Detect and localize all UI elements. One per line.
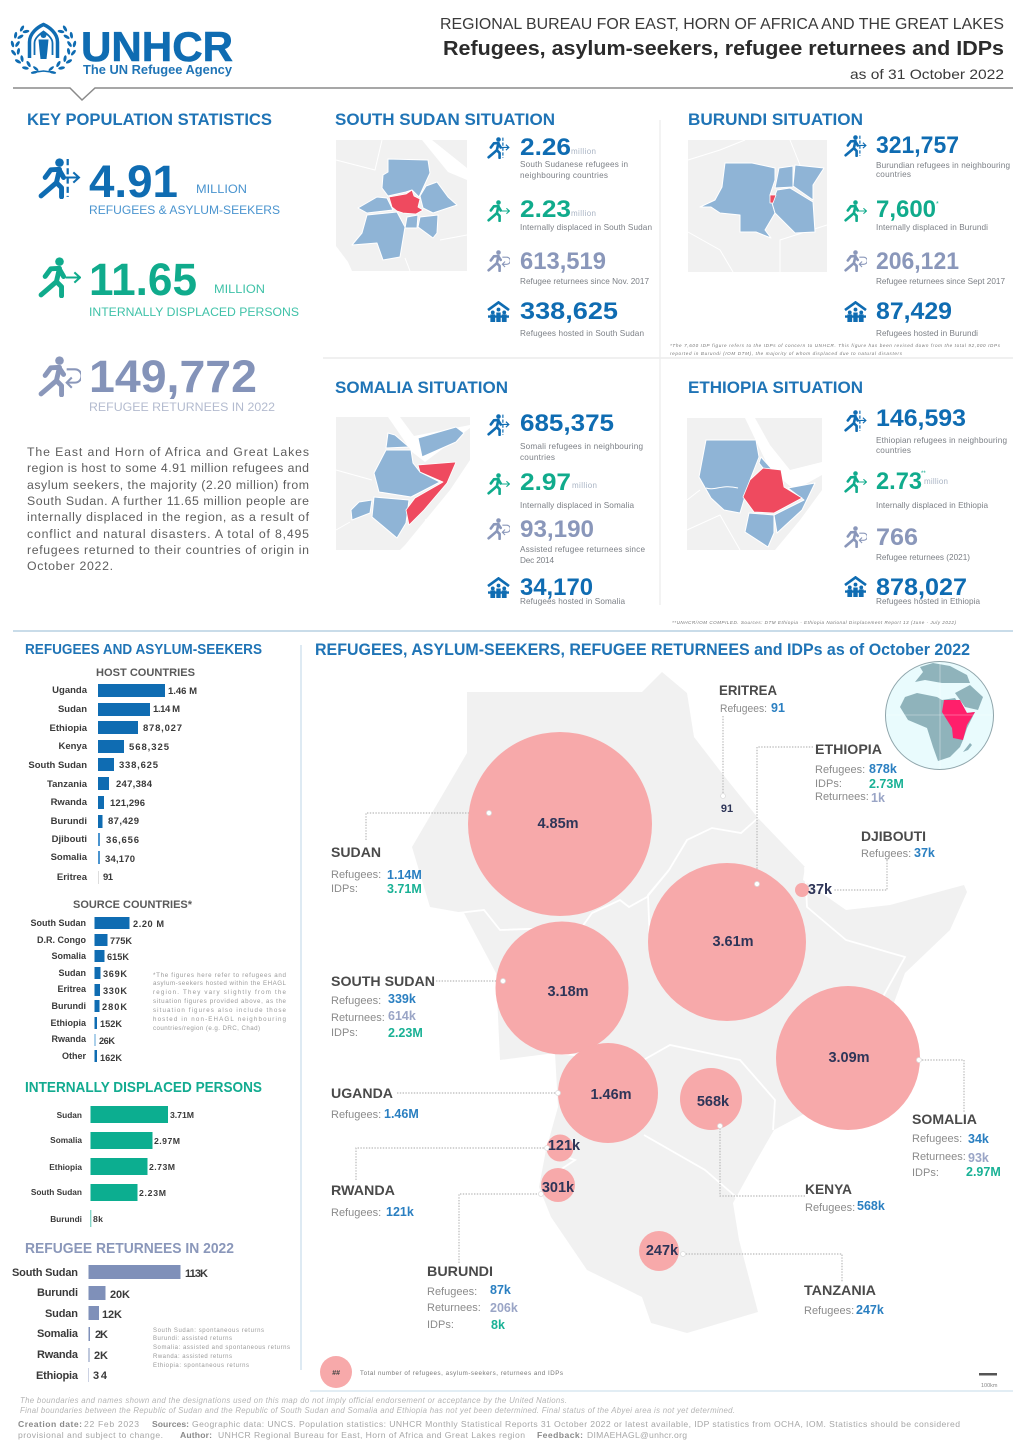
bar chart: host countries: 91 xyxy=(103,872,114,883)
credits: UNHCR Regional Bureau for East, Horn of Africa and Great Lakes region xyxy=(218,1430,525,1440)
stat: hosted: 87,429 xyxy=(876,298,952,325)
label: Somalia: Returnees: xyxy=(912,1151,966,1163)
stat: refugees: 4.91 xyxy=(89,156,178,207)
credits: provisional and subject to change. xyxy=(18,1430,163,1440)
stat: hosted xyxy=(488,574,625,606)
stat: IDPs xyxy=(489,196,652,232)
bar chart: host countries: Sudan xyxy=(58,704,87,715)
bar chart: source countries: D.R. Congo xyxy=(37,935,86,945)
bar chart: source countries xyxy=(30,899,193,1063)
bar chart: source countries: 280K xyxy=(102,1002,127,1012)
label: Djibouti: 37k xyxy=(914,846,935,860)
text block: summary: internally displaced in the region, as a result of xyxy=(27,510,310,524)
bar chart: IDPs: Ethiopia xyxy=(49,1162,82,1172)
bubble values: 3.61m xyxy=(712,934,754,950)
bar chart: returnees: Sudan xyxy=(45,1308,78,1320)
label: Burundi: IDPs: xyxy=(427,1319,454,1331)
note: return types: Somalia: assisted and spontaneous returns xyxy=(153,1345,290,1351)
bar chart: source countries: Rwanda xyxy=(51,1034,87,1044)
text block: summary: asylum seekers, the majority (2.20 million) from xyxy=(27,478,309,492)
bar chart: returnees: Ethiopia xyxy=(36,1370,79,1382)
icon: refugee xyxy=(41,158,79,197)
bar chart: source countries: 615K xyxy=(107,952,129,962)
text block: summary: South Sudan. A further 11.65 million people are xyxy=(27,494,309,508)
stat: IDPs: * xyxy=(936,201,939,208)
stat: IDPs: ** xyxy=(921,471,926,477)
label: Tanzania xyxy=(804,1282,884,1317)
stat: returnees: 766 xyxy=(876,524,918,551)
bar chart: returnees: 2K xyxy=(95,1329,108,1341)
panel: regional map xyxy=(315,641,1001,1389)
label: Ethiopia: 1k xyxy=(871,791,885,805)
bar chart: host countries: HOST COUNTRIES xyxy=(96,667,195,679)
label: Uganda: Refugees: xyxy=(331,1109,381,1121)
bar chart: source countries: 775K xyxy=(110,936,132,946)
label: Uganda: 1.46M xyxy=(384,1107,419,1121)
heading: INTERNALLY DISPLACED PERSONS xyxy=(25,1079,262,1096)
bubble values: 3.09m xyxy=(828,1050,870,1066)
note: return types: South Sudan: spontaneous returns xyxy=(153,1328,264,1334)
wordmark: UNHCR xyxy=(81,23,233,70)
panel: Somalia situation xyxy=(335,378,645,606)
bar chart: host countries: 1.14 M xyxy=(153,704,180,715)
label: Ethiopia: Returnees: xyxy=(815,791,869,803)
stat: returnees: Dec 2014 xyxy=(520,556,554,565)
stat: refugees: countries xyxy=(876,170,911,179)
bar chart: host countries: Burundi xyxy=(51,816,87,827)
label: Rwanda: Refugees: xyxy=(331,1207,381,1219)
bubble values: 37k xyxy=(808,882,833,898)
bar chart: returnees: South Sudan xyxy=(12,1267,78,1279)
bar chart: host countries xyxy=(28,667,197,884)
label: Kenya xyxy=(805,1181,885,1214)
stat: IDPs: Internally displaced in South Sudan xyxy=(520,223,652,232)
bar chart: host countries: Somalia xyxy=(51,852,88,863)
label: Kenya: 568k xyxy=(857,1199,885,1213)
label: Sudan: IDPs: xyxy=(331,883,358,895)
bar chart: returnees: 12K xyxy=(102,1309,122,1321)
bar chart: source countries: 330K xyxy=(103,986,127,996)
stat: returnees xyxy=(489,248,649,286)
stat: returnees: Assisted refugee returnees since xyxy=(520,545,645,554)
credits: Feedback: xyxy=(537,1430,583,1440)
bubble values: 3.18m xyxy=(547,984,589,1000)
bubble values: 301k xyxy=(542,1180,575,1196)
stat: IDPs xyxy=(41,254,299,319)
bar chart: host countries: 247,384 xyxy=(116,779,153,790)
header xyxy=(10,16,1013,100)
label: South Sudan: IDPs: xyxy=(331,1027,358,1039)
map: Somalia xyxy=(336,417,470,550)
label: Ethiopia: ETHIOPIA xyxy=(815,741,882,757)
stat: hosted: 878,027 xyxy=(876,574,967,601)
label: Somalia: Refugees: xyxy=(912,1133,962,1145)
credits: Sources: xyxy=(152,1419,189,1429)
credits: Creation date: xyxy=(18,1419,82,1429)
bar chart: host countries: Djibouti xyxy=(52,834,87,845)
bar chart: host countries: 338,625 xyxy=(119,760,159,771)
text block: summary: region is host to some 4.91 million refugees and xyxy=(27,461,309,475)
bar chart: host countries: 121,296 xyxy=(110,798,145,809)
bubble values: 121k xyxy=(548,1138,581,1154)
stat: returnees: 149,772 xyxy=(89,351,257,402)
stat: IDPs: Internally displaced in Somalia xyxy=(520,501,634,510)
label: Djibouti xyxy=(861,828,935,860)
header title block xyxy=(440,16,1004,82)
label: Burundi: Returnees: xyxy=(427,1302,481,1314)
tagline: The UN Refugee Agency xyxy=(83,63,232,77)
bar chart: returnees: Somalia xyxy=(37,1328,79,1340)
map: South Sudan xyxy=(336,140,467,271)
bubble values: 568k xyxy=(697,1094,730,1110)
bar chart: host countries: Uganda xyxy=(52,685,88,696)
bar chart: source countries: 26K xyxy=(99,1036,115,1046)
heading: KEY POPULATION STATISTICS xyxy=(27,110,272,129)
bar chart: host countries: 878,027 xyxy=(143,723,182,734)
stat: refugees xyxy=(489,410,643,462)
map: Burundi xyxy=(688,140,827,272)
heading: REFUGEE RETURNEES IN 2022 xyxy=(25,1240,234,1257)
label: Rwanda xyxy=(331,1182,414,1219)
bar chart: IDPs: Burundi xyxy=(50,1214,82,1224)
stat: returnees: 93,190 xyxy=(520,516,594,543)
bar chart: source countries: Sudan xyxy=(58,968,86,978)
text block: summary xyxy=(27,445,310,573)
heading: ETHIOPIA SITUATION xyxy=(688,378,863,397)
stat: IDPs: million xyxy=(572,481,597,490)
stat: hosted: 34,170 xyxy=(520,574,593,601)
note: return types: Rwanda: assisted returns xyxy=(153,1354,232,1360)
label: Burundi: 206k xyxy=(490,1301,518,1315)
stat: returnees: 613,519 xyxy=(520,248,606,275)
footnote: **UNHCR/IOM COMPILED. Sources: DTM Ethiopia - Ethiopia National Displacement Report 13 (June - July 2022) xyxy=(672,620,956,625)
stat: refugees: Burundian refugees in neighbouring xyxy=(876,161,1010,170)
note: source countries: countries/region (e.g. DRC, Chad) xyxy=(153,1025,260,1032)
label: Somalia: IDPs: xyxy=(912,1167,939,1179)
label: Rwanda: 121k xyxy=(386,1205,414,1219)
bar chart: source countries: 152K xyxy=(100,1019,122,1029)
stat: IDPs: million xyxy=(924,477,948,486)
label: Tanzania: Refugees: xyxy=(804,1305,854,1317)
text block: summary: October 2022. xyxy=(27,559,113,573)
credits xyxy=(18,1419,960,1440)
bar chart: returnees: 34 xyxy=(93,1370,108,1382)
label: South Sudan: Refugees: xyxy=(331,995,381,1007)
globe locator xyxy=(886,662,994,770)
label: South Sudan: SOUTH SUDAN xyxy=(331,973,435,989)
stat: returnees xyxy=(846,524,970,562)
label: South Sudan xyxy=(331,973,435,1040)
note: return types: Ethiopia: spontaneous returns xyxy=(153,1363,249,1369)
heading: SOUTH SUDAN SITUATION xyxy=(335,110,555,129)
stat: refugees xyxy=(846,405,1007,455)
stat: IDPs: 2.73 xyxy=(876,468,922,495)
footnote: reported in Burundi (IOM DTM), the majority of whom displaced due to natural disasters xyxy=(670,351,903,356)
bar chart: host countries: Eritrea xyxy=(57,872,88,883)
bar chart: source countries: 2.20 M xyxy=(133,919,164,929)
bubble values: 1.46m xyxy=(590,1087,632,1103)
label: Eritrea: ERITREA xyxy=(719,682,777,698)
bar chart: returnees xyxy=(12,1265,208,1382)
legend: Total number of refugees, asylum-seekers, returnees and IDPs xyxy=(360,1370,563,1377)
stat: refugees: South Sudanese refugees in xyxy=(520,160,628,169)
stat: IDPs xyxy=(489,469,634,510)
note: return types: Burundi: assisted returns xyxy=(153,1336,232,1342)
label: South Sudan: Returnees: xyxy=(331,1012,385,1024)
stat: IDPs: 2.23 xyxy=(520,196,571,223)
bar chart: returnees: Rwanda xyxy=(37,1349,79,1361)
map: Ethiopia xyxy=(687,418,822,550)
label: South Sudan: 2.23M xyxy=(388,1026,423,1040)
bar chart: host countries: 1.46 M xyxy=(168,686,197,697)
UNHCR logo xyxy=(10,23,233,77)
bubbles xyxy=(468,732,920,1271)
bar chart: source countries: 162K xyxy=(100,1053,122,1063)
stat: IDPs: 2.97 xyxy=(520,469,571,496)
icon: UNHCR wreath emblem xyxy=(10,24,77,74)
stat: hosted: Refugees hosted in Burundi xyxy=(876,329,978,338)
heading: BURUNDI SITUATION xyxy=(688,110,863,129)
stat: refugees xyxy=(846,132,1010,179)
bubble values: 247k xyxy=(646,1243,679,1259)
bar chart: IDPs: 2.73M xyxy=(149,1162,175,1172)
stat: refugees xyxy=(489,134,628,180)
stat: refugees: countries xyxy=(520,453,555,462)
panel: South Sudan situation xyxy=(335,110,652,338)
disclaimer: The boundaries and names shown and the designations used on this map do not imply official endorsement or acceptance by the United Nations. xyxy=(20,1396,567,1405)
heading: REFUGEES, ASYLUM-SEEKERS, REFUGEE RETURNEES and IDPs as of October 2022 xyxy=(315,641,970,659)
legend xyxy=(320,1356,563,1388)
credits: DIMAEHAGL@unhcr.org xyxy=(587,1430,687,1440)
bar chart: source countries: Other xyxy=(62,1051,86,1061)
note: source countries xyxy=(153,972,287,1032)
label: Eritrea: Refugees: xyxy=(720,703,767,715)
header title block: Refugees, asylum-seekers, refugee returnees and IDPs xyxy=(443,38,1004,60)
panel: key population statistics xyxy=(27,110,310,573)
text block: summary: refugees returned to their countries of origin in xyxy=(27,543,309,557)
label: Sudan: Refugees: xyxy=(331,869,381,881)
callout pins xyxy=(486,794,922,1256)
label: Kenya: KENYA xyxy=(805,1181,852,1197)
note: source countries: situation figures provided above, as the xyxy=(153,998,287,1005)
bubble values xyxy=(537,803,870,1259)
bar chart: IDPs: 8k xyxy=(93,1214,103,1224)
stat: IDPs: Internally displaced in Burundi xyxy=(876,223,988,232)
panel: refugee returnees chart xyxy=(12,1240,290,1382)
bar chart: source countries: SOURCE COUNTRIES* xyxy=(73,899,193,911)
label: Burundi: 87k xyxy=(490,1283,511,1297)
label: Ethiopia xyxy=(815,741,904,805)
bar chart: IDPs: 2.97M xyxy=(154,1136,180,1146)
stat: IDPs: 7,600 xyxy=(876,196,936,223)
header title block: as of 31 October 2022 xyxy=(850,66,1004,82)
icon: returnee xyxy=(41,356,82,395)
stat: returnees xyxy=(489,516,645,565)
text block: summary: conflict and natural disasters. A total of 8,495 xyxy=(27,527,309,541)
bar chart: host countries: 36,656 xyxy=(106,835,139,846)
stat: refugees: Somali refugees in neighbouring xyxy=(520,442,643,451)
bar chart: source countries: Eritrea xyxy=(57,984,87,994)
map: region base xyxy=(412,672,967,1333)
stat: IDPs: Internally displaced in Ethiopia xyxy=(876,501,988,510)
stat: refugees: countries xyxy=(876,446,911,455)
stat: IDPs xyxy=(846,468,988,510)
stat: hosted xyxy=(845,574,980,606)
label: Ethiopia: 2.73M xyxy=(869,777,904,791)
stat: refugees: 2.26 xyxy=(520,134,571,161)
note: source countries: hosted in non-EHAGL neighbouring xyxy=(153,1016,287,1023)
note: source countries: asylum-seekers hosted within the EHAGL xyxy=(153,980,287,987)
bar chart: host countries: 87,429 xyxy=(108,816,139,827)
note: source countries: situation figures also include those xyxy=(153,1007,287,1014)
label: Ethiopia: IDPs: xyxy=(815,778,842,790)
credits: Author: xyxy=(180,1430,212,1440)
label: Sudan: 3.71M xyxy=(387,882,422,896)
credits: Geographic data: UNCS. Population statistics: UNHCR Monthly Statistical Reports 31 October 2022 or latest available, IDP statistics from OCHA, IOM. Statistics should be considered xyxy=(192,1419,960,1429)
bar chart: IDPs: Sudan xyxy=(57,1110,82,1120)
footnote: *The 7,600 IDP figure refers to the IDPs of concern to UNHCR. This figure has been revised down from the total 92,000 IDPs xyxy=(670,343,1001,348)
stat: hosted: Refugees hosted in Ethiopia xyxy=(876,597,980,606)
panel: internally displaced persons chart xyxy=(25,1079,262,1227)
bar chart: IDPs xyxy=(31,1106,194,1227)
bar chart: host countries: 568,325 xyxy=(129,742,170,753)
label: South Sudan: 339k xyxy=(388,992,416,1006)
label: Eritrea xyxy=(719,682,785,715)
bar chart: host countries: South Sudan xyxy=(28,760,87,771)
label: Kenya: Refugees: xyxy=(805,1202,855,1214)
label: Uganda xyxy=(331,1085,419,1121)
bar chart: host countries: 34,170 xyxy=(105,854,135,865)
bar chart: source countries: 369K xyxy=(103,969,127,979)
bar chart: IDPs: Somalia xyxy=(50,1135,82,1145)
panel: refugees and asylum-seekers charts xyxy=(25,642,287,1063)
text block: summary: The East and Horn of Africa and Great Lakes xyxy=(27,445,309,459)
disclaimer xyxy=(20,1396,735,1415)
bar chart: IDPs: 2.23M xyxy=(139,1188,166,1198)
stat: hosted: Refugees hosted in South Sudan xyxy=(520,329,644,338)
label: Uganda: UGANDA xyxy=(331,1085,393,1101)
bar chart: host countries: Ethiopia xyxy=(50,723,88,734)
stat: refugees xyxy=(41,156,280,217)
stat: hosted: Refugees hosted in Somalia xyxy=(520,597,625,606)
stat: IDPs: 11.65 xyxy=(89,254,197,305)
icon: IDP xyxy=(41,257,80,296)
bar chart: source countries: Burundi xyxy=(52,1001,86,1011)
stat: refugees: 685,375 xyxy=(520,410,614,437)
note: source countries: region. They vary slightly from the xyxy=(153,989,287,996)
bar chart: returnees: 20K xyxy=(110,1289,130,1301)
stat: hosted xyxy=(488,298,644,338)
panel: Burundi situation xyxy=(670,110,1010,356)
label: South Sudan: 614k xyxy=(388,1009,416,1023)
label: Sudan: 1.14M xyxy=(387,868,422,882)
stat: returnees xyxy=(41,351,275,414)
scale bar xyxy=(979,1373,998,1389)
bubble values: 91 xyxy=(721,803,733,815)
bar chart: source countries: Somalia xyxy=(51,951,87,961)
stat: refugees: MILLION xyxy=(196,182,247,196)
label: Tanzania: 247k xyxy=(856,1303,884,1317)
stat: IDPs: million xyxy=(571,209,596,218)
stat: IDPs xyxy=(846,196,988,232)
label: Somalia: SOMALIA xyxy=(912,1111,977,1127)
note: return types xyxy=(153,1328,290,1369)
stat: refugees: neighbouring countries xyxy=(520,171,608,180)
bar chart: host countries: Tanzania xyxy=(47,779,88,790)
label: Djibouti: Refugees: xyxy=(861,848,911,860)
bar chart: host countries: Kenya xyxy=(58,741,88,752)
bar chart: host countries: Rwanda xyxy=(51,797,88,808)
stat: hosted: 338,625 xyxy=(520,298,618,325)
bar chart: returnees: 2K xyxy=(94,1350,108,1362)
stat: IDPs: MILLION xyxy=(214,282,265,296)
stat: refugees: 146,593 xyxy=(876,405,966,432)
label: Ethiopia: 878k xyxy=(869,762,897,776)
label: Burundi: 8k xyxy=(491,1318,505,1332)
bar chart: source countries: South Sudan xyxy=(30,918,86,928)
panel: Ethiopia situation xyxy=(672,378,1007,625)
label: Somalia xyxy=(912,1111,1001,1179)
bar chart: IDPs: South Sudan xyxy=(31,1187,82,1197)
label: Sudan xyxy=(331,844,422,896)
scale bar: 100km xyxy=(981,1383,998,1389)
stat: refugees: million xyxy=(571,147,596,156)
stat: IDPs: INTERNALLY DISPLACED PERSONS xyxy=(89,305,299,319)
label: Ethiopia: Refugees: xyxy=(815,764,865,776)
disclaimer: Final boundaries between the Republic of Sudan and the Republic of South Sudan and Somalia and Ethiopia has not yet been determined. Final status of the Abyei area is not yet determined. xyxy=(20,1406,735,1415)
stat: returnees: 206,121 xyxy=(876,248,959,275)
note: source countries: *The figures here refer to refugees and xyxy=(153,972,287,979)
stat: returnees xyxy=(846,248,1005,286)
label: Somalia: 2.97M xyxy=(966,1165,1001,1179)
callout lines xyxy=(356,716,964,1282)
stat: returnees: Refugee returnees (2021) xyxy=(876,553,970,562)
footnote xyxy=(670,343,1001,356)
label: Burundi xyxy=(427,1263,518,1332)
legend: ## xyxy=(332,1370,340,1377)
stat: refugees: Ethiopian refugees in neighbouring xyxy=(876,436,1007,445)
bar chart: returnees: Burundi xyxy=(37,1287,78,1299)
label: Rwanda: RWANDA xyxy=(331,1182,395,1198)
bar chart: source countries: Ethiopia xyxy=(50,1018,87,1028)
stat: hosted xyxy=(845,298,978,338)
label: Tanzania: TANZANIA xyxy=(804,1282,876,1298)
label: Somalia: 34k xyxy=(968,1132,989,1146)
stat: refugees: 321,757 xyxy=(876,132,959,159)
stat: returnees: Refugee returnees since Sept 2017 xyxy=(876,277,1005,286)
label: Eritrea: 91 xyxy=(771,701,785,715)
heading: SOMALIA SITUATION xyxy=(335,378,508,397)
bar chart: IDPs: 3.71M xyxy=(170,1110,194,1120)
heading: REFUGEES AND ASYLUM-SEEKERS xyxy=(25,642,262,658)
label: Sudan: SUDAN xyxy=(331,844,381,860)
credits: 22 Feb 2023 xyxy=(84,1419,139,1429)
label: Somalia: 93k xyxy=(968,1151,989,1165)
bar chart: returnees: 113K xyxy=(185,1268,208,1280)
bubble values: 4.85m xyxy=(537,816,579,832)
stat: refugees: REFUGEES & ASYLUM-SEEKERS xyxy=(89,203,280,217)
header title block: REGIONAL BUREAU FOR EAST, HORN OF AFRICA AND THE GREAT LAKES xyxy=(440,16,1004,33)
label: Djibouti: DJIBOUTI xyxy=(861,828,926,844)
label: Burundi: BURUNDI xyxy=(427,1263,493,1279)
label: Burundi: Refugees: xyxy=(427,1286,477,1298)
stat: returnees: REFUGEE RETURNEES IN 2022 xyxy=(89,400,275,414)
stat: returnees: Refugee returnees since Nov. 2017 xyxy=(520,277,649,286)
